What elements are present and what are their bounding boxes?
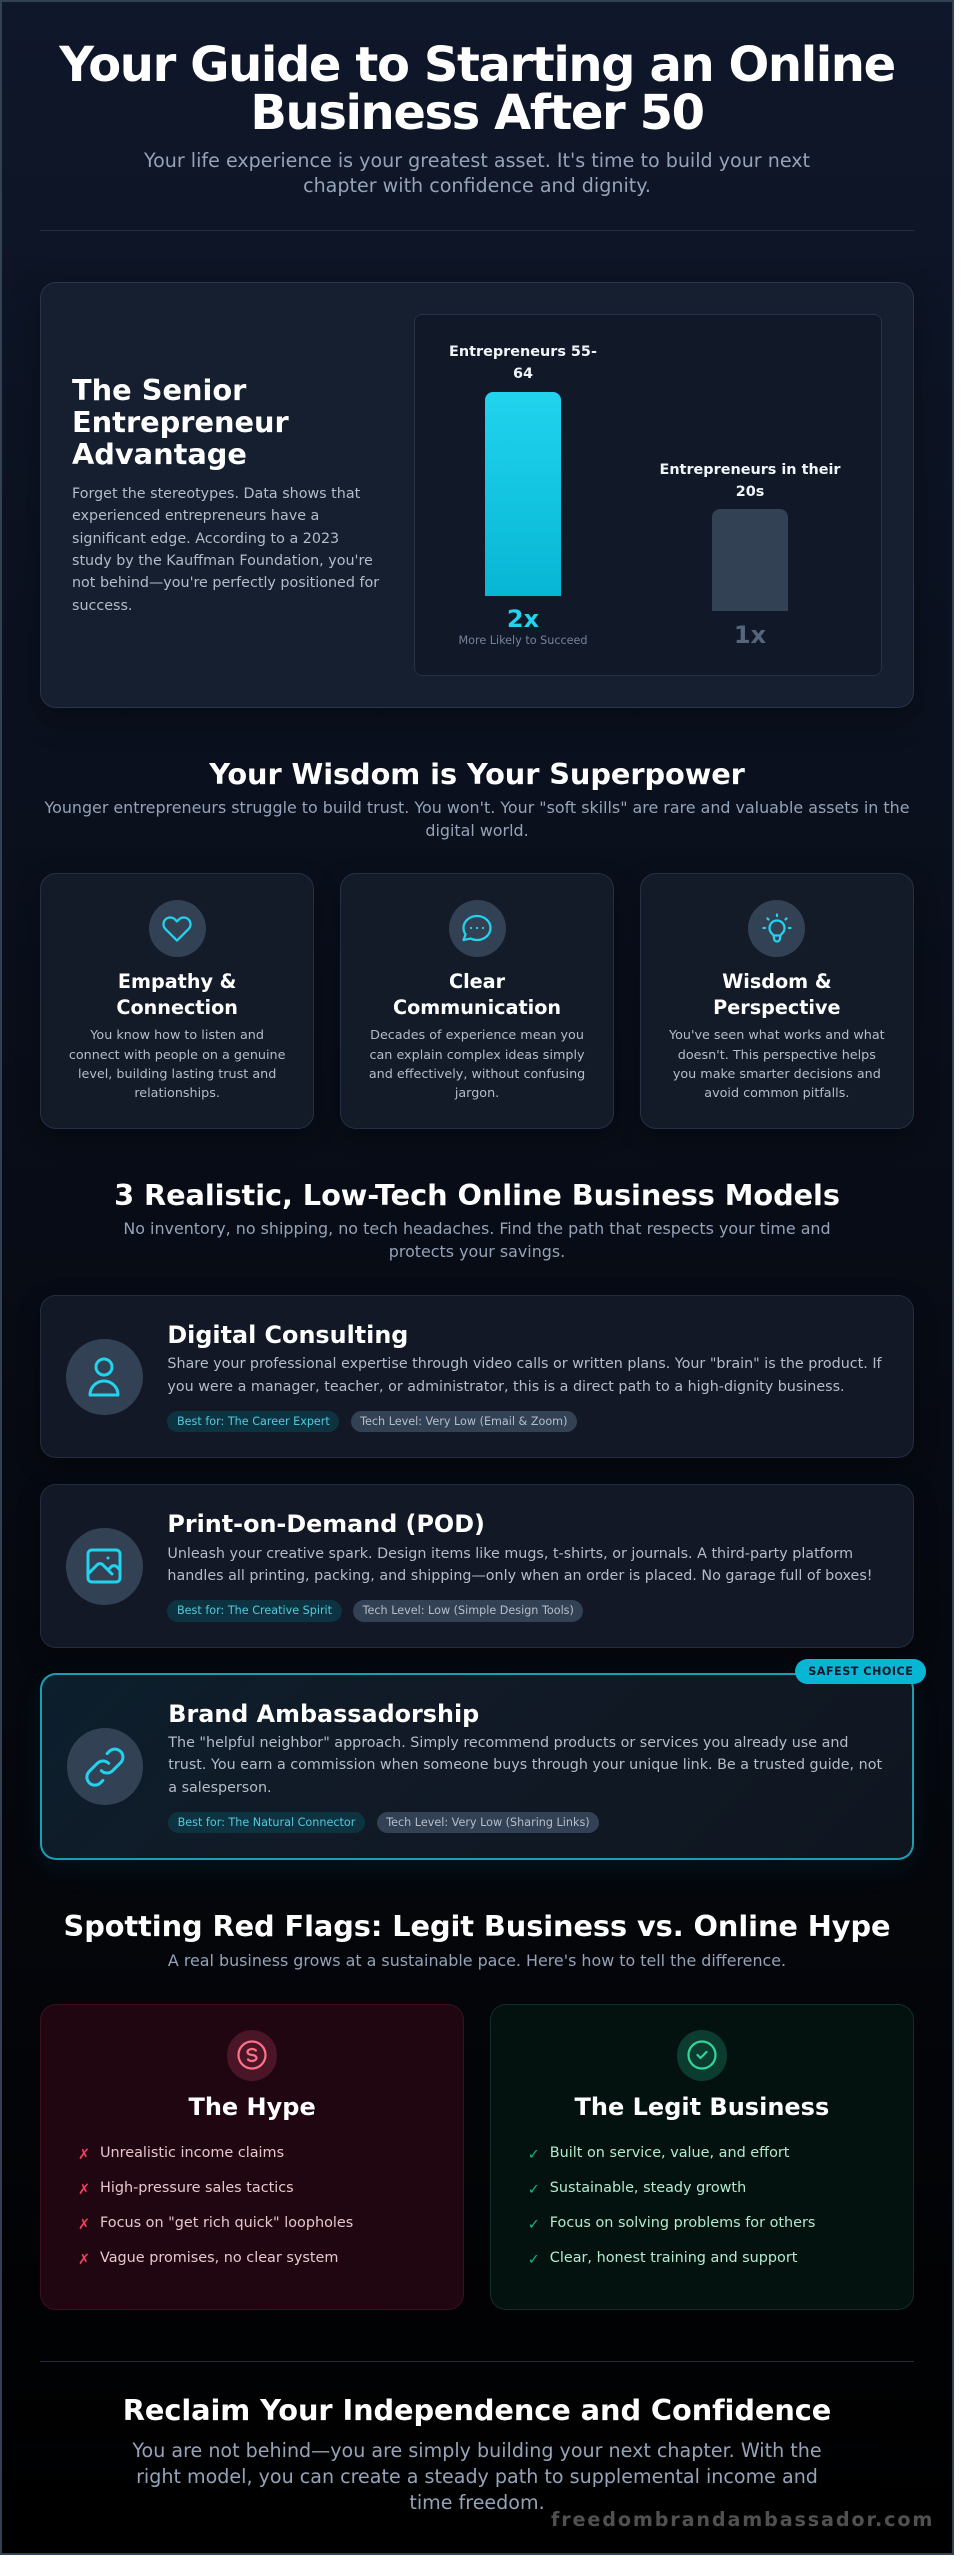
card text: You've seen what works and what (669, 1028, 885, 1043)
card title: Wisdom & (722, 970, 832, 993)
card text: and effectively, without confusing (369, 1067, 585, 1082)
card text (69, 1028, 285, 1101)
value: 1x: 1x (734, 621, 766, 649)
model description: you were a manager, teacher, or administrator, this is a direct path to a high-dignity business. (167, 1379, 845, 1395)
model description: a salesperson. (168, 1780, 272, 1796)
model title: Digital Consulting (167, 1321, 408, 1349)
panel: perspective (640, 873, 914, 1129)
watermark: freedombrandambassador.com (551, 2508, 934, 2531)
bar label: entrepreneurs 55-64 (449, 344, 597, 382)
list item: ✓ (528, 2252, 540, 2268)
tag: best for: Best for: The Career Expert (177, 1414, 330, 1428)
card title: The Legit Business (575, 2093, 829, 2121)
text: senior advantage body: experienced entrepreneurs have a (72, 508, 319, 524)
list item: ✗ (78, 2182, 90, 2198)
card title: Perspective (713, 996, 841, 1019)
heading: senior advantage (72, 373, 289, 471)
panel: senior entrepreneur advantage (40, 282, 914, 708)
tag: best for (167, 1410, 339, 1432)
list item: High-pressure sales tactics (100, 2180, 294, 2196)
subtitle: Your life experience is your greatest asset. It's time to build your next (144, 149, 810, 172)
bar label: entrepreneurs in their 20s: 20s (736, 484, 764, 500)
bar label: entrepreneurs 55-64: Entrepreneurs 55- (449, 344, 597, 360)
card text (369, 1028, 585, 1101)
list item: ✓ (528, 2217, 540, 2233)
card text: can explain complex ideas simply (369, 1048, 585, 1063)
model description: Share your professional expertise through video calls or written plans. Your "brain" is the product. If (167, 1356, 882, 1372)
subtitle: chapter with confidence and dignity. (303, 174, 651, 197)
value: 2x: 2x (507, 605, 539, 633)
panel: the legit business (490, 2004, 914, 2310)
tag: tech level (353, 1600, 583, 1622)
icon: check circle (677, 2030, 727, 2081)
icon: user (66, 1339, 143, 1415)
heading: business models: 3 Realistic, Low-Tech Online Business Models (114, 1178, 840, 1212)
list item: Sustainable, steady growth (550, 2180, 746, 2196)
subheading: business models: No inventory, no shipping, no tech headaches. Find the path that respects your time and (123, 1219, 831, 1238)
model title: Print-on-Demand (POD) (167, 1510, 485, 1538)
subheading: wisdom: digital world. (425, 821, 529, 840)
list item: ✗ (78, 2217, 90, 2233)
tag: tech level: Tech Level: Low (Simple Design Tools) (363, 1604, 574, 1617)
heading: senior advantage: Entrepreneur (72, 405, 289, 439)
bar label: entrepreneurs in their 20s (659, 462, 840, 500)
tag: tech level: Tech Level: Very Low (Email & Zoom) (360, 1414, 567, 1428)
icon: light bulb (748, 900, 805, 957)
subheading: red flags: A real business grows at a sustainable pace. Here's how to tell the difference. (168, 1951, 786, 1970)
heading: wisdom: Your Wisdom is Your Superpower (209, 757, 745, 791)
card text: Decades of experience mean you (370, 1028, 584, 1043)
tag: best for: Best for: The Natural Connector (178, 1816, 355, 1829)
title: Your Guide to Starting an Online (59, 37, 895, 93)
subheading: wisdom: Younger entrepreneurs struggle to build trust. You won't. Your "soft skills" are rare and valuable assets in the (44, 798, 909, 817)
bar chart (414, 314, 882, 676)
subtitle (144, 149, 810, 197)
icon: image (66, 1528, 143, 1605)
card title (713, 970, 841, 1019)
model description: handles all printing, packing, and shipping—only when an order is placed. No garage full of boxes! (167, 1568, 873, 1584)
bar: entrepreneurs 55-64 (485, 392, 561, 596)
card text: you make smarter decisions and (673, 1067, 881, 1082)
icon: link (67, 1728, 143, 1805)
heading: senior advantage: The Senior (72, 373, 246, 407)
model description (167, 1546, 873, 1584)
text: senior advantage body: Forget the stereotypes. Data shows that (72, 486, 360, 502)
text: senior advantage body: not behind—you're perfectly positioned for (72, 575, 379, 591)
card text: jargon. (455, 1086, 499, 1101)
model description (168, 1735, 882, 1796)
badge: safest choice: SAFEST CHOICE (808, 1665, 913, 1678)
subheading: wisdom (44, 798, 909, 840)
bar label: entrepreneurs 55-64: 64 (513, 366, 533, 382)
list item: Vague promises, no clear system (100, 2250, 338, 2266)
bar: entrepreneurs in their 20s (712, 509, 788, 611)
model description: trust. You earn a commission when someone buys through your unique link. Be a trusted guide, not (168, 1757, 882, 1773)
card title: Empathy & (118, 970, 236, 993)
bar label: entrepreneurs in their 20s: Entrepreneurs in their (659, 462, 840, 478)
list item: Focus on "get rich quick" loopholes (100, 2215, 353, 2231)
list item: ✓ (528, 2182, 540, 2198)
heading: red flags: Spotting Red Flags: Legit Business vs. Online Hype (64, 1909, 890, 1943)
text: senior advantage body: study by the Kauffman Foundation, you're (72, 553, 373, 569)
icon: dollar (227, 2030, 277, 2081)
panel: digital consulting (40, 1295, 914, 1458)
card text: relationships. (134, 1086, 220, 1101)
list item: Clear, honest training and support (550, 2250, 797, 2266)
icon: heart (149, 900, 206, 957)
text: senior advantage body: success. (72, 598, 132, 614)
model description: Unleash your creative spark. Design items like mugs, t-shirts, or journals. A third-party platform (167, 1546, 853, 1562)
tag: tech level (377, 1812, 599, 1833)
closing text: You are not behind—you are simply building your next chapter. With the (132, 2439, 822, 2462)
tag: best for (168, 1812, 365, 1833)
card title (393, 970, 561, 1019)
tag: tech level: Tech Level: Very Low (Sharing Links) (386, 1816, 590, 1829)
text: senior advantage body (72, 486, 380, 614)
text: senior advantage body: significant edge. According to a 2023 (72, 531, 339, 547)
model title: Brand Ambassadorship (168, 1700, 479, 1728)
badge: safest choice (795, 1659, 926, 1684)
heading: senior advantage: Advantage (72, 437, 247, 471)
panel: communication (340, 873, 614, 1129)
subheading: business models: protects your savings. (389, 1242, 565, 1261)
card text: level, building lasting trust and (78, 1067, 276, 1082)
tag: best for: Best for: The Creative Spirit (177, 1604, 332, 1617)
list item: ✗ (78, 2147, 90, 2163)
panel: brand ambassadorship (40, 1673, 914, 1860)
panel: empathy (40, 873, 314, 1129)
model description: The "helpful neighbor" approach. Simply recommend products or services you already use and (168, 1735, 848, 1751)
tag: best for (167, 1600, 342, 1622)
list item: ✗ (78, 2252, 90, 2268)
card text: You know how to listen and (90, 1028, 264, 1043)
card title: The Hype (188, 2093, 316, 2121)
card text: doesn't. This perspective helps (678, 1048, 876, 1063)
closing text: time freedom. (409, 2491, 545, 2514)
card title: Communication (393, 996, 561, 1019)
card title (116, 970, 238, 1019)
tag: tech level (350, 1410, 577, 1432)
closing text: right model, you can create a steady path to supplemental income and (136, 2465, 818, 2488)
list item: Focus on solving problems for others (550, 2215, 815, 2231)
card text: connect with people on a genuine (69, 1048, 285, 1063)
panel: print on demand (40, 1484, 914, 1648)
caption: more likely to succeed: More Likely to Succeed (458, 634, 588, 647)
panel: the hype (40, 2004, 464, 2310)
list item: Unrealistic income claims (100, 2145, 284, 2161)
card text: avoid common pitfalls. (704, 1086, 849, 1101)
title (58, 37, 895, 141)
list item: Built on service, value, and effort (550, 2145, 789, 2161)
heading: reclaim: Reclaim Your Independence and Confidence (123, 2393, 831, 2427)
list item: ✓ (528, 2147, 540, 2163)
icon: chat bubble (449, 900, 506, 957)
card text (669, 1028, 885, 1101)
card title: Clear (449, 970, 505, 993)
closing text (132, 2439, 822, 2514)
model description (167, 1356, 882, 1395)
title: Business After 50 (250, 85, 704, 141)
subheading: business models (123, 1219, 831, 1261)
card title: Connection (116, 996, 238, 1019)
